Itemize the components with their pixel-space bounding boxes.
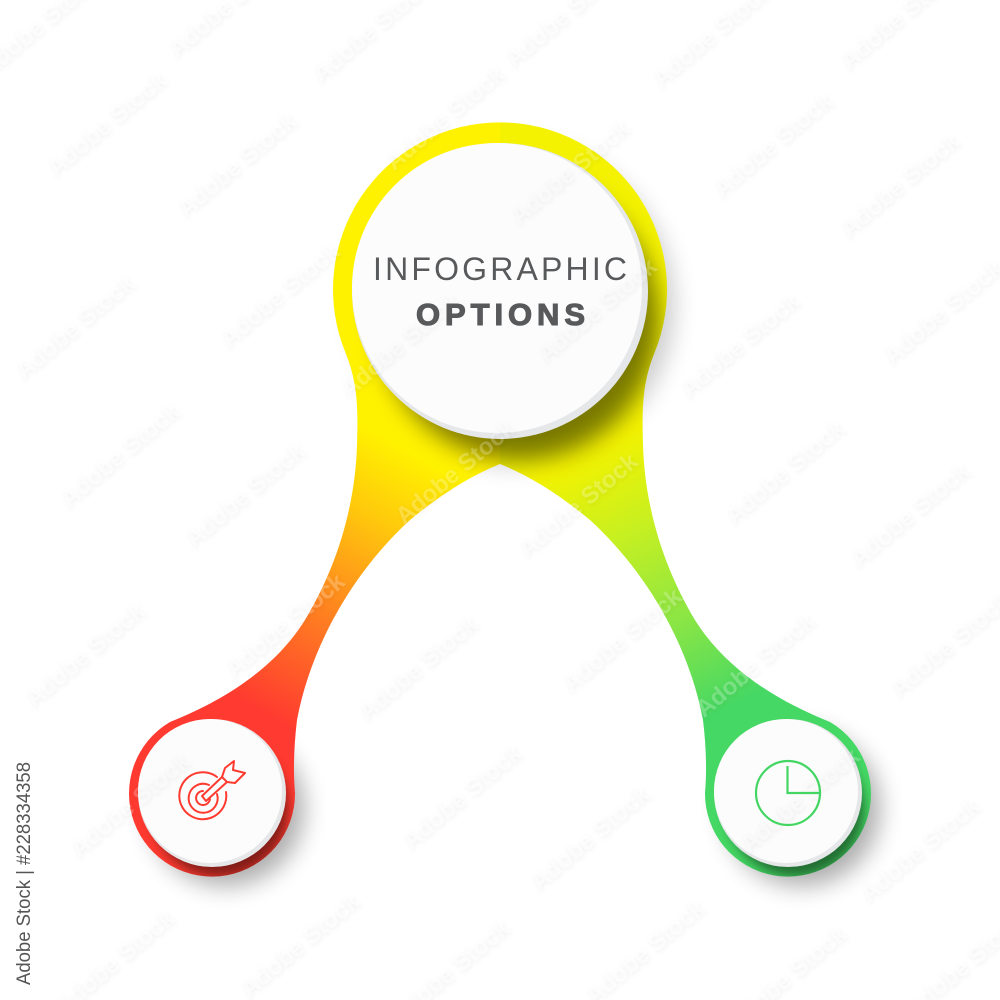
stock id caption: Adobe Stock | #228334358 — [14, 762, 35, 985]
watermarks: Adobe Stock — [513, 447, 644, 563]
watermarks: Adobe Stock — [172, 107, 303, 223]
watermarks: Adobe Stock — [20, 597, 151, 713]
watermarks: Adobe Stock — [235, 887, 366, 1000]
watermarks: Adobe Stock — [390, 414, 521, 530]
watermarks: Adobe Stock — [532, 252, 663, 368]
title line: INFOGRAPHIC: INFOGRAPHIC — [373, 251, 627, 287]
watermarks: Adobe Stock — [835, 127, 966, 243]
watermarks: Adobe Stock — [42, 66, 173, 182]
watermarks: Adobe Stock — [180, 437, 311, 553]
watermarks: Adobe Stock — [220, 567, 351, 683]
watermarks: Adobe Stock — [215, 237, 346, 353]
watermarks: Adobe Stock — [690, 607, 821, 723]
watermarks: Adobe Stock — [65, 747, 196, 863]
icon: target with arrow — [179, 761, 245, 819]
watermarks: Adobe Stock — [353, 610, 484, 726]
watermarks: Adobe Stock — [10, 269, 141, 385]
watermarks: Adobe Stock — [855, 792, 986, 908]
watermarks: Adobe Stock — [397, 739, 528, 855]
title line: OPTIONS: OPTIONS — [416, 297, 585, 332]
main circle — [352, 143, 648, 439]
outer soft shadows — [148, 145, 880, 886]
watermarks: Adobe Stock — [735, 742, 866, 858]
watermarks: Adobe Stock — [55, 397, 186, 513]
watermarks: Adobe Stock — [525, 780, 656, 896]
watermarks: Adobe Stock — [720, 414, 851, 530]
right small circle — [714, 719, 862, 867]
left small circle — [138, 719, 286, 867]
watermarks: Adobe Stock — [708, 87, 839, 203]
watermarks: Adobe Stock — [380, 60, 511, 176]
watermarks: Adobe Stock — [557, 582, 688, 698]
watermarks: Adobe Stock — [675, 287, 806, 403]
watermarks: Adobe Stock — [845, 457, 976, 573]
watermarks: Adobe Stock — [505, 114, 636, 230]
connector band with gradient — [129, 122, 871, 877]
watermarks: Adobe Stock — [335, 287, 466, 403]
icon: pie chart — [756, 761, 820, 825]
